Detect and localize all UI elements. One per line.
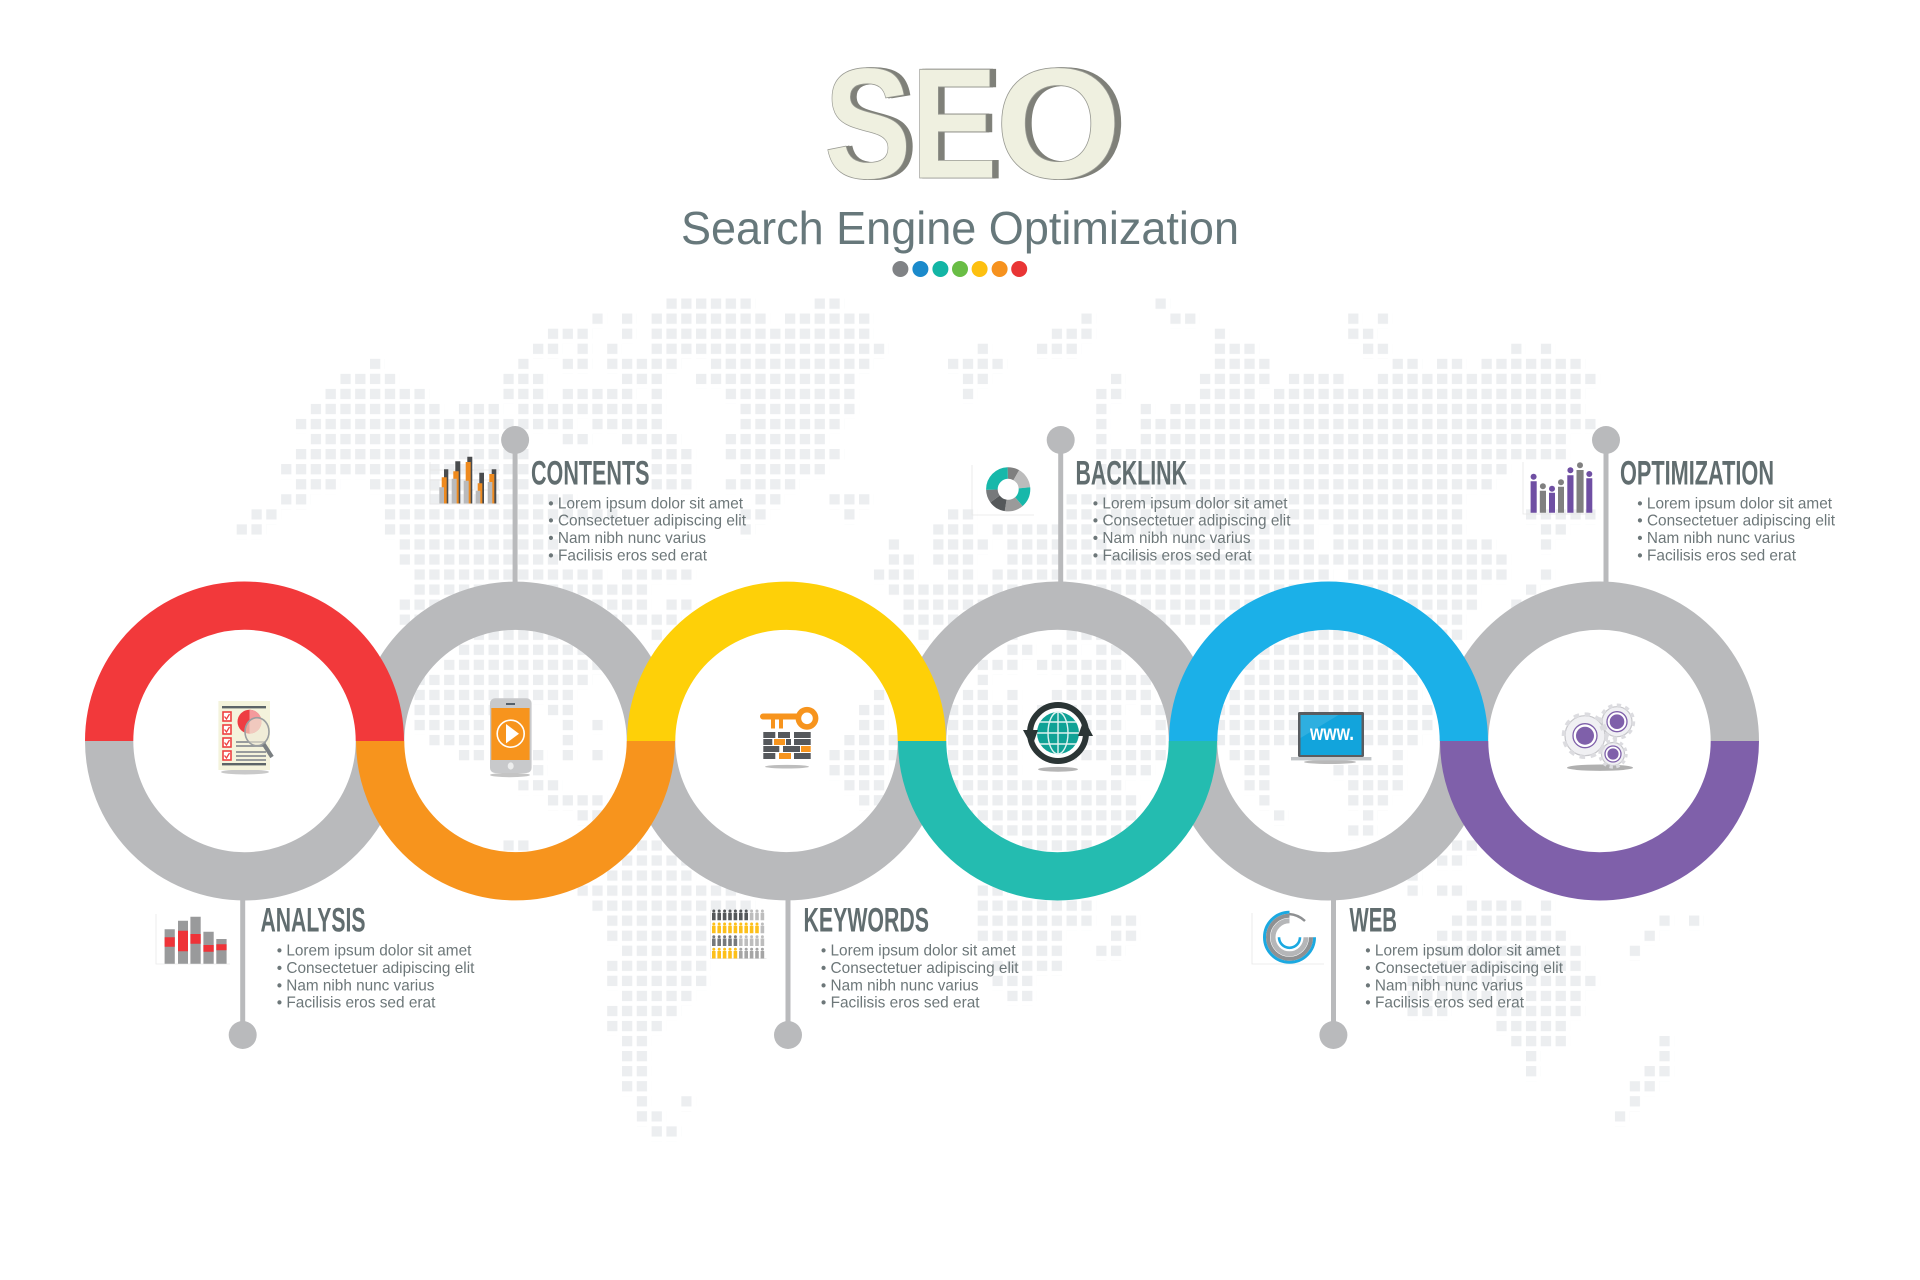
icon: report with magnifier — [218, 701, 272, 774]
bullet list: • Facilisis eros sed erat — [1365, 995, 1525, 1012]
bullet list: • Consectetuer adipiscing elit — [277, 960, 475, 977]
bullet list: • Consectetuer adipiscing elit — [1365, 960, 1564, 977]
bullet list — [1093, 495, 1291, 564]
bullet list: • Lorem ipsum dolor sit amet — [821, 943, 1016, 960]
heading: BACKLINK — [1076, 454, 1187, 492]
bullet list: • Facilisis eros sed erat — [548, 547, 708, 564]
ring arc: red — [109, 606, 380, 741]
pin: contents — [501, 426, 529, 585]
bullet list: • Facilisis eros sed erat — [1093, 547, 1252, 564]
bullet list: • Consectetuer adipiscing elit — [1637, 513, 1836, 530]
ring arc: teal — [922, 741, 1193, 876]
icon: phone with play button — [490, 698, 532, 777]
grey half arcs — [109, 606, 1735, 876]
callout: web — [1252, 902, 1564, 1012]
bullet list: • Lorem ipsum dolor sit amet — [277, 943, 472, 960]
heading: CONTENTS — [531, 454, 650, 492]
ring arc: yellow — [651, 606, 922, 741]
callout: analysis — [156, 902, 475, 1012]
bullet list: • Nam nibh nunc varius — [821, 977, 979, 994]
bullet list — [821, 943, 1019, 1012]
icon: contents bar chart — [430, 457, 500, 504]
bullet list — [277, 943, 475, 1012]
bullet list: • Nam nibh nunc varius — [548, 530, 706, 547]
heading: OPTIMIZATION — [1620, 454, 1774, 492]
bullet list: • Lorem ipsum dolor sit amet — [548, 495, 744, 512]
bullet list: • Consectetuer adipiscing elit — [821, 960, 1019, 977]
bullet list — [1637, 495, 1836, 564]
heading: WEB — [1350, 902, 1397, 940]
callout: optimization — [1523, 454, 1836, 564]
callout: keywords — [710, 902, 1019, 1012]
row of colour dots — [892, 261, 1027, 277]
title: SEO: S — [824, 35, 911, 212]
ring arc: blue — [1193, 606, 1464, 741]
bullet list: • Nam nibh nunc varius — [1365, 977, 1523, 994]
chain of rings — [109, 606, 1735, 876]
title: SEO — [824, 35, 1122, 212]
bullet list: • Consectetuer adipiscing elit — [548, 513, 747, 530]
icon: gears — [1564, 705, 1634, 771]
pin: optimization — [1592, 426, 1620, 585]
bullet list: • Nam nibh nunc varius — [1637, 530, 1795, 547]
callout: backlink — [972, 454, 1291, 564]
ring arc: purple — [1464, 741, 1735, 876]
icon: donut chart — [972, 465, 1034, 515]
icon: rows of people — [710, 910, 766, 958]
icon: laptop www: www. — [1309, 722, 1354, 745]
bullet list — [1365, 943, 1564, 1012]
heading: ANALYSIS — [260, 902, 366, 940]
bullet list: • Consectetuer adipiscing elit — [1093, 513, 1291, 530]
bullet list: • Nam nibh nunc varius — [277, 977, 435, 994]
subtitle: Search Engine Optimization — [681, 202, 1239, 254]
ring arc: orange — [380, 741, 651, 876]
title: SEO: O — [995, 35, 1122, 211]
bullet list: • Lorem ipsum dolor sit amet — [1093, 495, 1288, 512]
bullet list: • Nam nibh nunc varius — [1093, 530, 1251, 547]
bullet list: • Lorem ipsum dolor sit amet — [1637, 495, 1833, 512]
callout: contents — [430, 454, 747, 564]
bullet list: • Lorem ipsum dolor sit amet — [1365, 943, 1561, 960]
pin: backlink — [1047, 426, 1075, 585]
icon: laptop www — [1291, 712, 1371, 764]
bullet list — [548, 495, 747, 564]
pin: analysis — [229, 895, 257, 1049]
heading: KEYWORDS — [804, 902, 929, 940]
bullet list: • Facilisis eros sed erat — [277, 995, 436, 1012]
dotted world map background — [237, 298, 1704, 1141]
icon: globe with arrows — [1023, 705, 1093, 772]
pin: keywords — [774, 895, 802, 1049]
icon: stacked bars — [156, 914, 230, 964]
pin: web — [1319, 895, 1347, 1049]
icon: key and brick wall — [760, 710, 816, 768]
bullet list: • Facilisis eros sed erat — [1637, 547, 1797, 564]
icon: radial arc chart — [1252, 912, 1324, 964]
bullet list: • Facilisis eros sed erat — [821, 995, 980, 1012]
title: SEO: E — [911, 35, 997, 212]
icon: purple lollipop bars — [1523, 462, 1595, 514]
